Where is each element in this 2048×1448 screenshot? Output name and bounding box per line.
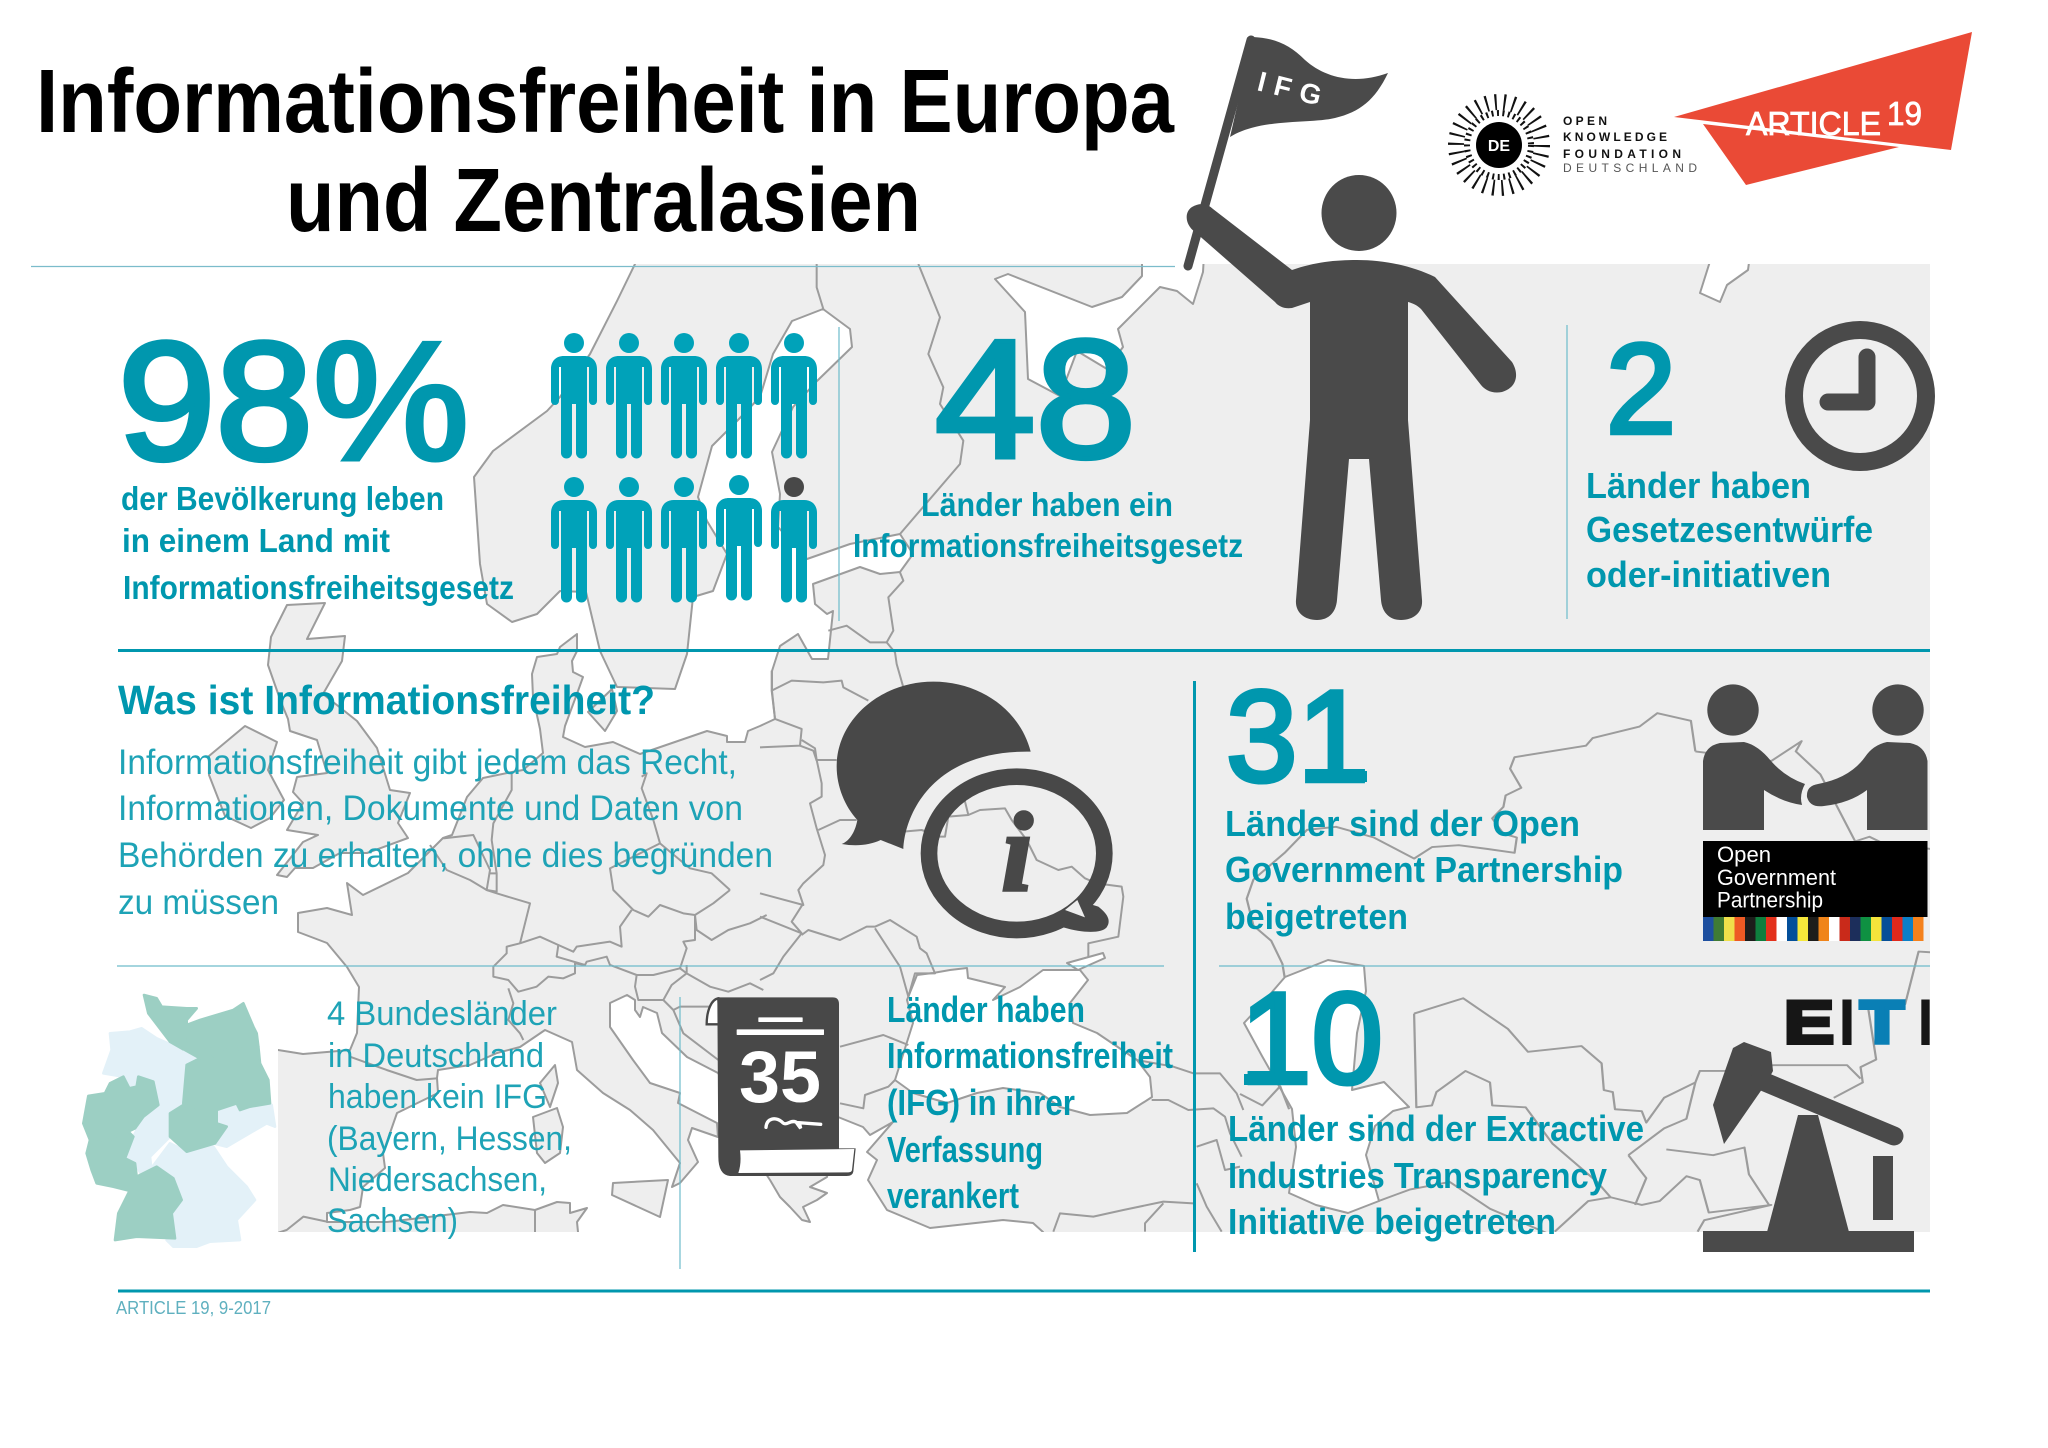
- stat: 98 percent: 98%: [118, 307, 469, 495]
- icon: person holding IFG flag: IFG: [1255, 66, 1334, 114]
- icon: handshake: [1703, 684, 1928, 830]
- stat: 98 percent: Informationsfreiheitsgesetz: [123, 569, 514, 606]
- stat: 35 countries constitution: [887, 989, 1173, 1216]
- title: [36, 52, 1175, 251]
- icon: ten people pictogram, one with dark head: [551, 333, 817, 602]
- logo: Open Knowledge Foundation Deutschland: FOUNDATION: [1563, 147, 1681, 161]
- stat: 31 countries Open Government Partnership: [1225, 663, 1623, 937]
- text block: 4 Bundesländer: in Deutschland: [328, 1037, 544, 1075]
- stat: 35 countries constitution: Verfassung: [887, 1129, 1043, 1170]
- icon: constitution scroll with 35: 35: [739, 1037, 821, 1118]
- stat: 31 countries Open Government Partnership: 31: [1226, 663, 1369, 809]
- text block: 4 Bundesländer: Niedersachsen,: [328, 1161, 547, 1199]
- stat: 98 percent: der Bevölkerung leben: [121, 480, 444, 517]
- logo: EITI: I: [1841, 989, 1853, 1056]
- stat: 35 countries constitution: verankert: [887, 1175, 1019, 1216]
- stat: 2 countries with drafts: oder-initiativen: [1586, 554, 1831, 595]
- text block: definition: Informationsfreiheit gibt jedem das Recht,: [118, 743, 737, 782]
- stat: 2 countries with drafts: Gesetzesentwürfe: [1586, 509, 1873, 550]
- icon: person holding IFG flag: [1187, 37, 1516, 620]
- logo: EITI: T: [1860, 989, 1904, 1056]
- text block: 4 Bundesländer: Sachsen): [327, 1202, 458, 1240]
- heading: Was ist Informationsfreiheit: Was ist Informationsfreiheit?: [118, 677, 655, 723]
- stat: 35 countries constitution: Informationsfreiheit: [887, 1035, 1173, 1076]
- text block: 4 Bundesländer: haben kein IFG: [328, 1078, 547, 1116]
- logo: Article 19: 19: [1887, 95, 1922, 132]
- stat: 31 countries Open Government Partnership: beigetreten: [1225, 896, 1408, 937]
- stat: 35 countries constitution: Länder haben: [887, 989, 1085, 1030]
- logo: EITI: [1784, 989, 1931, 1056]
- title: und Zentralasien: [286, 151, 921, 251]
- logo: Open Government Partnership: Government: [1717, 865, 1836, 890]
- stat: 2 countries with drafts: Länder haben: [1586, 465, 1811, 506]
- text block: definition: Behörden zu erhalten, ohne dies begründen: [118, 836, 773, 875]
- stat: 48 countries: [853, 305, 1243, 564]
- logo: Open Government Partnership: [1703, 841, 1928, 941]
- stat: 31 countries Open Government Partnership: Länder sind der Open: [1225, 803, 1580, 844]
- logo: Open Knowledge Foundation Deutschland: OPEN: [1563, 114, 1607, 128]
- icon: speech bubbles with info sign: [837, 682, 1109, 932]
- logo: Article 19: [1674, 32, 1972, 185]
- stat: 10 countries EITI: Länder sind der Extractive: [1228, 1108, 1644, 1149]
- stat: 98 percent: in einem Land mit: [122, 522, 390, 559]
- text block: definition: Informationen, Dokumente und Daten von: [118, 789, 743, 828]
- stat: 10 countries EITI: Industries Transparency: [1228, 1155, 1607, 1196]
- text block: 4 Bundesländer: 4 Bundesländer: [327, 995, 557, 1033]
- logo: EITI: E: [1784, 989, 1834, 1056]
- logo: Open Knowledge Foundation Deutschland: DE: [1488, 138, 1510, 155]
- logo: Open Knowledge Foundation Deutschland: [1456, 102, 1697, 188]
- icon: oil pump jack: [1703, 1042, 1914, 1252]
- text block: 4 Bundesländer: (Bayern, Hessen,: [327, 1120, 572, 1158]
- logo: Open Government Partnership: Partnership: [1717, 888, 1823, 912]
- logo: Open Knowledge Foundation Deutschland: DEUTSCHLAND: [1563, 161, 1697, 175]
- stat: 10 countries EITI: Initiative beigetreten: [1228, 1201, 1556, 1242]
- logo: Open Knowledge Foundation Deutschland: KNOWLEDGE: [1563, 130, 1667, 144]
- logo: Open Government Partnership: Open: [1717, 842, 1771, 867]
- icon: speech bubbles with info sign: i: [1001, 791, 1033, 915]
- text block: definition: [118, 743, 773, 922]
- icon: constitution scroll with 35: [707, 997, 856, 1176]
- logo: Article 19: ARTICLE: [1746, 105, 1881, 142]
- icon: clock: [1794, 330, 1926, 462]
- map: German federal states: [83, 995, 275, 1247]
- stat: 48 countries: Länder haben ein: [921, 486, 1173, 523]
- stat: 2 countries with drafts: 2: [1606, 318, 1676, 461]
- footer source: ARTICLE 19, 9-2017: [116, 1298, 271, 1318]
- text block: definition: zu müssen: [118, 883, 279, 922]
- stat: 31 countries Open Government Partnership: Government Partnership: [1225, 849, 1623, 890]
- stat: 48 countries: 48: [935, 305, 1136, 493]
- stat: 10 countries EITI: [1228, 965, 1644, 1242]
- stat: 98 percent: [118, 307, 514, 606]
- stat: 48 countries: Informationsfreiheitsgesetz: [853, 527, 1243, 564]
- stat: 35 countries constitution: (IFG) in ihrer: [887, 1082, 1075, 1123]
- title: Informationsfreiheit in Europa: [36, 52, 1175, 152]
- stat: 2 countries with drafts: [1586, 318, 1873, 595]
- background map of Europe and Central Asia: [209, 250, 1931, 1245]
- stat: 10 countries EITI: 10: [1240, 965, 1383, 1111]
- logo: EITI: I: [1920, 989, 1931, 1056]
- text block: 4 Bundesländer: [327, 995, 572, 1240]
